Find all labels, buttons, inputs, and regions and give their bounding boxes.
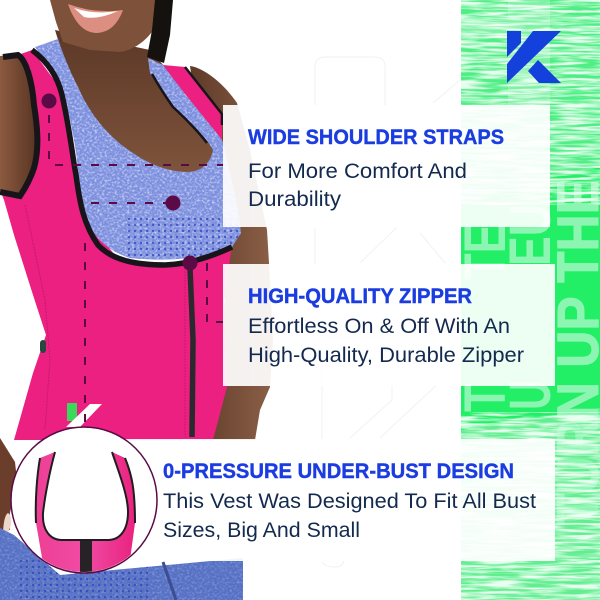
streak texture top bbox=[461, 0, 600, 205]
fingernail bbox=[3, 513, 11, 533]
knit dot band bbox=[125, 218, 243, 260]
streak texture bottom bbox=[461, 412, 600, 600]
hair bbox=[147, 0, 173, 63]
body text: Effortless On & Off With An bbox=[248, 314, 510, 338]
faded letter columns in upper area bbox=[461, 0, 550, 105]
faint watermark outlines bbox=[315, 57, 460, 567]
upper textured area bbox=[461, 0, 600, 178]
heading: HIGH-QUALITY ZIPPER bbox=[248, 285, 472, 308]
right arm bbox=[190, 66, 273, 440]
callout connector: zipper dot bbox=[182, 256, 224, 322]
blue leggings bbox=[0, 520, 243, 600]
vest product bbox=[36, 452, 135, 575]
lips bbox=[68, 4, 123, 33]
panel: 0-pressure under-bust design bbox=[125, 439, 555, 561]
slogan fragment left top: TE bbox=[453, 224, 518, 280]
callout connector: comfort dot bbox=[91, 196, 180, 210]
black armhole trim bbox=[0, 55, 37, 196]
small logo on vest bbox=[66, 403, 102, 427]
teeth bbox=[74, 8, 118, 18]
belt clasp bbox=[40, 340, 46, 353]
green textured background panel bbox=[453, 0, 600, 600]
model photo bbox=[0, 0, 273, 600]
body text: Sizes, Big And Small bbox=[163, 518, 360, 542]
left hand bbox=[0, 438, 17, 530]
black vest neckline trim bbox=[32, 50, 232, 265]
heading: WIDE SHOULDER STRAPS bbox=[248, 126, 504, 149]
logo: K bbox=[507, 31, 561, 83]
zipper bbox=[190, 268, 193, 437]
vest product zipper bbox=[80, 541, 92, 574]
face bbox=[50, 0, 158, 52]
blue knit top bbox=[35, 39, 241, 260]
panel: wide shoulder straps bbox=[223, 105, 550, 227]
body text: This Vest Was Designed To Fit All Bust bbox=[163, 489, 536, 513]
body text: Durability bbox=[248, 187, 341, 211]
callout connector: under-bust line bbox=[84, 243, 86, 430]
right strap trim bbox=[152, 67, 222, 143]
knit texture bbox=[30, 35, 245, 265]
inset circle: vest detail bbox=[11, 427, 157, 575]
right strap pink bbox=[163, 65, 222, 145]
neck and chest bbox=[55, 30, 216, 175]
slogan fragment middle top: EU bbox=[498, 204, 563, 266]
body text: High-Quality, Durable Zipper bbox=[248, 343, 524, 367]
left arm bbox=[0, 54, 36, 198]
slogan fragment left low: T bbox=[453, 384, 518, 412]
lower textured area bbox=[461, 408, 600, 600]
vest product trim bbox=[36, 452, 135, 540]
body text: For More Comfort And bbox=[248, 159, 467, 183]
slogan fragment middle low: U bbox=[498, 380, 563, 410]
panel: high-quality zipper bbox=[223, 264, 555, 386]
hot pink vest bbox=[0, 50, 232, 440]
heading: 0-PRESSURE UNDER-BUST DESIGN bbox=[163, 460, 514, 483]
callout connector: shoulder strap dot bbox=[42, 94, 224, 165]
vest side seam bbox=[25, 205, 185, 437]
